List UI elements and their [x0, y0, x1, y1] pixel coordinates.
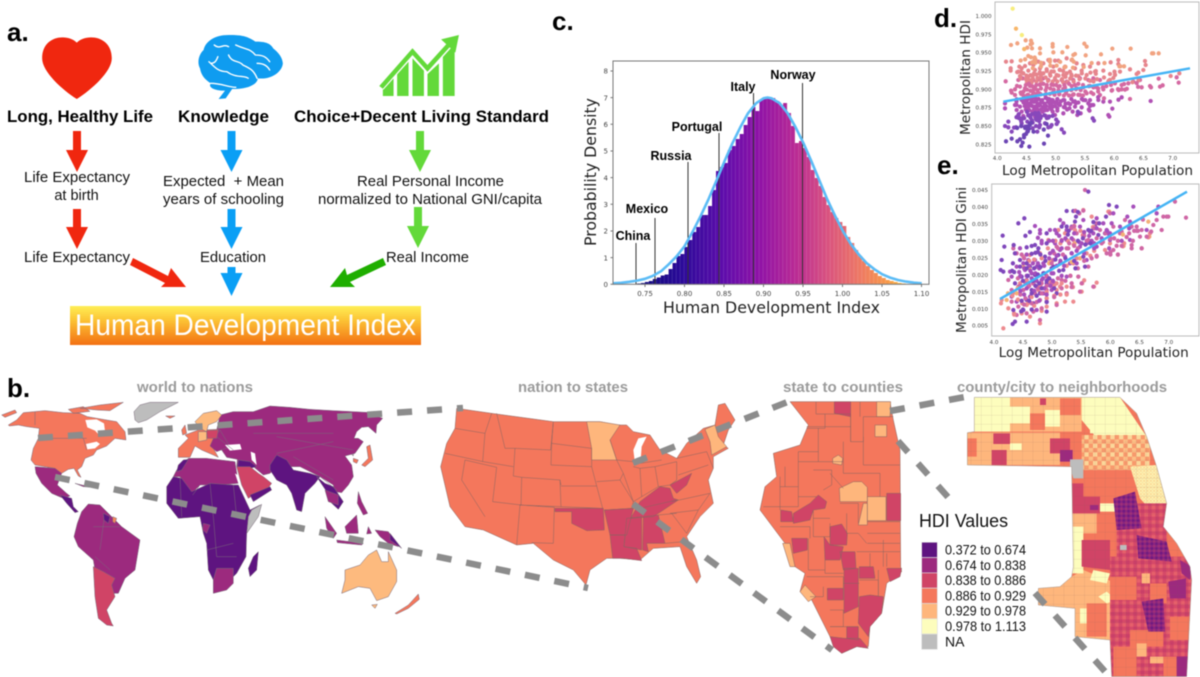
trend line	[1003, 68, 1190, 102]
text: life expectancy at birth	[24, 170, 131, 204]
country labels: Norway	[770, 68, 816, 82]
x tick labels: 5.5	[1081, 156, 1090, 162]
y tick labels: 0.020	[972, 273, 988, 279]
x tick labels: 7.0	[1164, 340, 1174, 346]
text: schooling	[163, 174, 284, 208]
x tick labels: 4.5	[1019, 340, 1028, 346]
x axis tick labels: 0.80	[677, 290, 692, 298]
arrow: dark green diagonal	[330, 258, 386, 287]
legend labels: 0.674 to 0.838	[945, 557, 1026, 573]
text: real personal income	[318, 174, 543, 208]
x axis tick labels: 0.75	[637, 290, 653, 298]
axes frame	[610, 61, 929, 287]
country labels	[616, 68, 816, 243]
y axis tick labels: 1	[604, 254, 608, 262]
y axis tick labels: 6	[604, 121, 609, 129]
legend labels: 0.372 to 0.674	[945, 542, 1026, 558]
banner: human development index: Human Development Index	[75, 309, 416, 342]
x tick labels: 6.5	[1135, 340, 1144, 346]
panel c: histogram of HDI	[552, 6, 929, 317]
map: world	[2, 402, 419, 626]
y tick labels: 1.000	[975, 14, 992, 20]
x axis tick labels	[637, 290, 929, 298]
y tick labels	[975, 14, 992, 148]
text: real personal income: Real Personal Income	[357, 174, 504, 190]
panel letter c: c.	[552, 6, 574, 36]
y tick labels: 0.925	[975, 69, 992, 75]
country marker lines	[636, 83, 802, 284]
text: real personal income: normalized to National GNI/capita	[318, 192, 543, 208]
y tick labels: 0.900	[975, 87, 992, 93]
x tick labels: 6.0	[1106, 340, 1115, 346]
text: real income: Real Income	[386, 250, 469, 266]
y axis title: Probability Density	[581, 98, 600, 246]
panel b: multi-scale HDI maps	[2, 373, 1197, 677]
map: Chicago neighborhoods	[963, 393, 1197, 677]
arrow: blue 1	[220, 131, 242, 172]
y tick labels: 0.975	[975, 32, 992, 38]
scatter points	[1005, 9, 1179, 147]
text: schooling: years of schooling	[163, 192, 284, 208]
y axis tick labels: 3	[604, 201, 608, 209]
country labels: Russia	[650, 149, 693, 163]
y tick labels: 0.035	[972, 222, 988, 228]
y axis tick labels: 8	[604, 68, 608, 76]
axes frame	[992, 184, 1199, 336]
panel letter b: b.	[7, 373, 30, 403]
arrow: blue 3	[220, 267, 242, 296]
x tick labels	[990, 340, 1174, 346]
x tick labels	[993, 156, 1178, 162]
country labels: Italy	[730, 80, 756, 94]
y axis tick labels	[604, 68, 609, 289]
icon: brain	[198, 35, 283, 99]
country labels: China	[616, 229, 651, 243]
legend swatches	[922, 542, 937, 649]
y tick labels: 0.010	[972, 307, 988, 313]
panel letter d: d.	[934, 3, 957, 33]
text: life expectancy at birth: Life Expectancy	[24, 170, 131, 186]
x axis tick labels: 1.10	[914, 290, 929, 298]
zoom connectors: dashed lines between maps	[38, 397, 1109, 676]
text: life expectancy: Life Expectancy	[24, 250, 131, 266]
arrow: red 1	[66, 131, 88, 172]
x tick labels: 7.0	[1168, 156, 1178, 162]
arrow: green 1	[409, 131, 431, 172]
country labels: Mexico	[626, 202, 669, 216]
arrow: green 2	[407, 207, 429, 248]
panel a: HDI components flow diagram	[7, 17, 549, 345]
y tick labels: 0.950	[975, 51, 992, 57]
panel e: scatter metropolitan HDI Gini	[937, 150, 1199, 361]
trend line	[1000, 192, 1187, 299]
heading: choice and living standard: Choice+Decent Living Standard	[294, 107, 549, 126]
legend labels	[945, 542, 1026, 649]
y tick labels: 0.015	[972, 290, 988, 296]
y axis tick labels: 4	[604, 174, 609, 182]
text: education: Education	[200, 250, 266, 266]
icon: heart	[42, 37, 112, 99]
legend labels: 0.886 to 0.929	[945, 587, 1026, 603]
panel d: scatter metropolitan HDI	[934, 2, 1199, 179]
scatter points	[1001, 190, 1186, 328]
text: life expectancy at birth: at birth	[54, 188, 99, 204]
y axis title: Metropolitan HDI	[959, 20, 974, 135]
histogram bars	[613, 61, 929, 284]
title: world to nations: world to nations	[136, 379, 253, 396]
axes frame	[995, 2, 1199, 153]
x tick labels: 6.0	[1110, 156, 1119, 162]
text: schooling: Expected + Mean	[163, 174, 284, 190]
panel letter a: a.	[7, 17, 29, 47]
y axis tick labels: 7	[604, 94, 608, 102]
map: contiguous United States	[441, 403, 735, 585]
fitted density curve	[613, 98, 922, 283]
arrow: blue 2	[220, 209, 242, 249]
x tick labels: 4.5	[1022, 156, 1031, 162]
legend labels: NA	[945, 633, 965, 649]
map: Illinois counties	[760, 402, 902, 653]
legend labels: 0.838 to 0.886	[945, 572, 1026, 588]
y axis title: Metropolitan HDI Gini	[955, 187, 970, 333]
y tick labels: 0.025	[972, 256, 988, 262]
legend: HDI values	[919, 511, 1026, 649]
legend title: HDI Values	[919, 511, 1008, 531]
title: state to counties: state to counties	[783, 379, 903, 396]
x axis tick labels: 0.95	[795, 290, 811, 298]
x axis tick labels: 0.90	[756, 290, 771, 298]
x axis title: Human Development Index	[663, 298, 880, 317]
legend labels: 0.978 to 1.113	[945, 618, 1026, 634]
x axis tick labels: 1.00	[835, 290, 850, 298]
y tick labels: 0.875	[975, 106, 992, 112]
panel letter e: e.	[937, 150, 959, 180]
y tick labels: 0.850	[975, 124, 992, 130]
title: nation to states: nation to states	[518, 379, 628, 396]
arrow: red diagonal	[130, 258, 186, 287]
x axis tick labels: 0.85	[716, 290, 732, 298]
x tick labels: 4.0	[993, 156, 1002, 162]
y tick labels: 0.030	[972, 239, 988, 245]
y tick labels: 0.825	[975, 142, 992, 148]
country labels: Portugal	[672, 120, 722, 134]
x tick labels: 5.0	[1048, 340, 1057, 346]
icon: rising chart	[380, 35, 459, 96]
x tick labels: 4.0	[990, 340, 999, 346]
y tick labels: 0.005	[972, 324, 988, 330]
y axis tick labels: 2	[604, 228, 608, 236]
x axis tick labels: 1.05	[874, 290, 890, 298]
x axis title: Log Metropolitan Population	[999, 346, 1189, 361]
arrow: red 2	[66, 209, 88, 249]
x tick labels: 5.0	[1051, 156, 1061, 162]
y tick labels: 0.045	[972, 188, 988, 194]
x tick labels: 5.5	[1077, 340, 1086, 346]
legend labels: 0.929 to 0.978	[945, 603, 1026, 619]
x axis title: Log Metropolitan Population	[1002, 164, 1193, 179]
y tick labels: 0.040	[972, 205, 988, 211]
heading: knowledge: Knowledge	[178, 107, 269, 126]
x tick labels: 6.5	[1139, 156, 1148, 162]
y tick labels	[972, 188, 988, 330]
heading: long healthy life: Long, Healthy Life	[7, 107, 153, 126]
y axis tick labels: 5	[604, 148, 608, 156]
y axis tick labels: 0	[604, 281, 608, 289]
title: county/city to neighborhoods: county/city to neighborhoods	[957, 379, 1167, 396]
